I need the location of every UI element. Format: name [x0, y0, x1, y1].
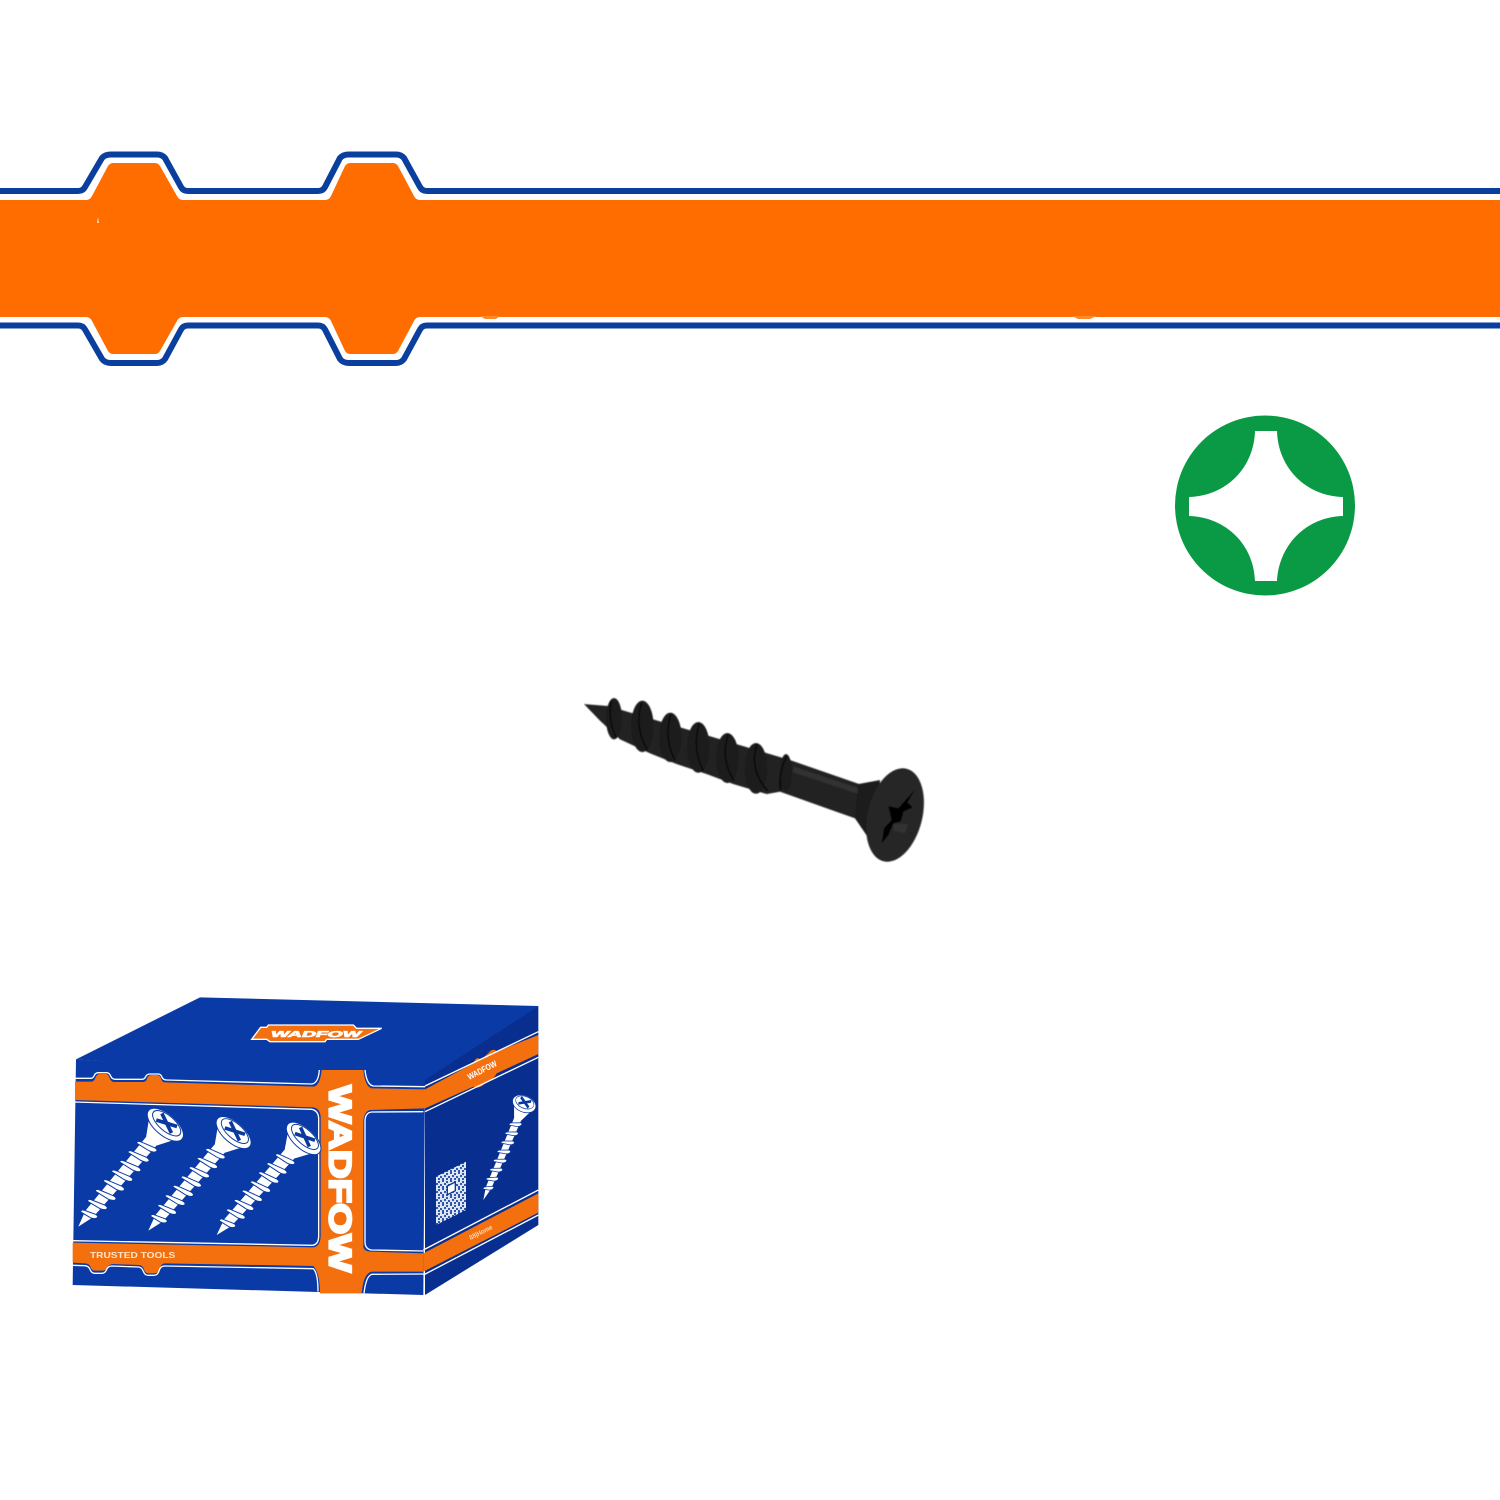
box screw illustration 3 — [201, 1116, 326, 1249]
side band small mark: 88|Home — [468, 1224, 494, 1242]
box front face — [73, 1059, 425, 1295]
side orange band bottom — [423, 1193, 538, 1272]
banner lower blue outline — [0, 326, 1500, 363]
box lid logo: WADFOW — [269, 1030, 364, 1039]
side band WADFOW logo: WADFOW — [466, 1058, 499, 1082]
box top face — [76, 997, 538, 1086]
TRUSTED TOOLS label: TRUSTED TOOLS — [90, 1250, 176, 1260]
box screw illustration 2 — [132, 1111, 256, 1245]
product photo: black drywall screw — [584, 698, 933, 868]
side orange band top — [425, 1035, 538, 1108]
box lid logo — [252, 1025, 382, 1042]
top banner: orange band with notched tabs — [0, 154, 1500, 363]
banner upper blue outline — [0, 154, 1500, 191]
icon: green cross recess badge — [1175, 416, 1355, 596]
product box: WADFOW packaging — [62, 997, 539, 1295]
box screw illustration 1 — [62, 1102, 189, 1241]
side screw illustration — [472, 1091, 539, 1205]
banner orange band — [0, 163, 1500, 354]
front orange cross bands — [73, 1070, 425, 1293]
box right face — [425, 1006, 538, 1295]
vertical WADFOW wordmark: WADFOW — [322, 1085, 357, 1273]
QR code — [436, 1162, 466, 1225]
